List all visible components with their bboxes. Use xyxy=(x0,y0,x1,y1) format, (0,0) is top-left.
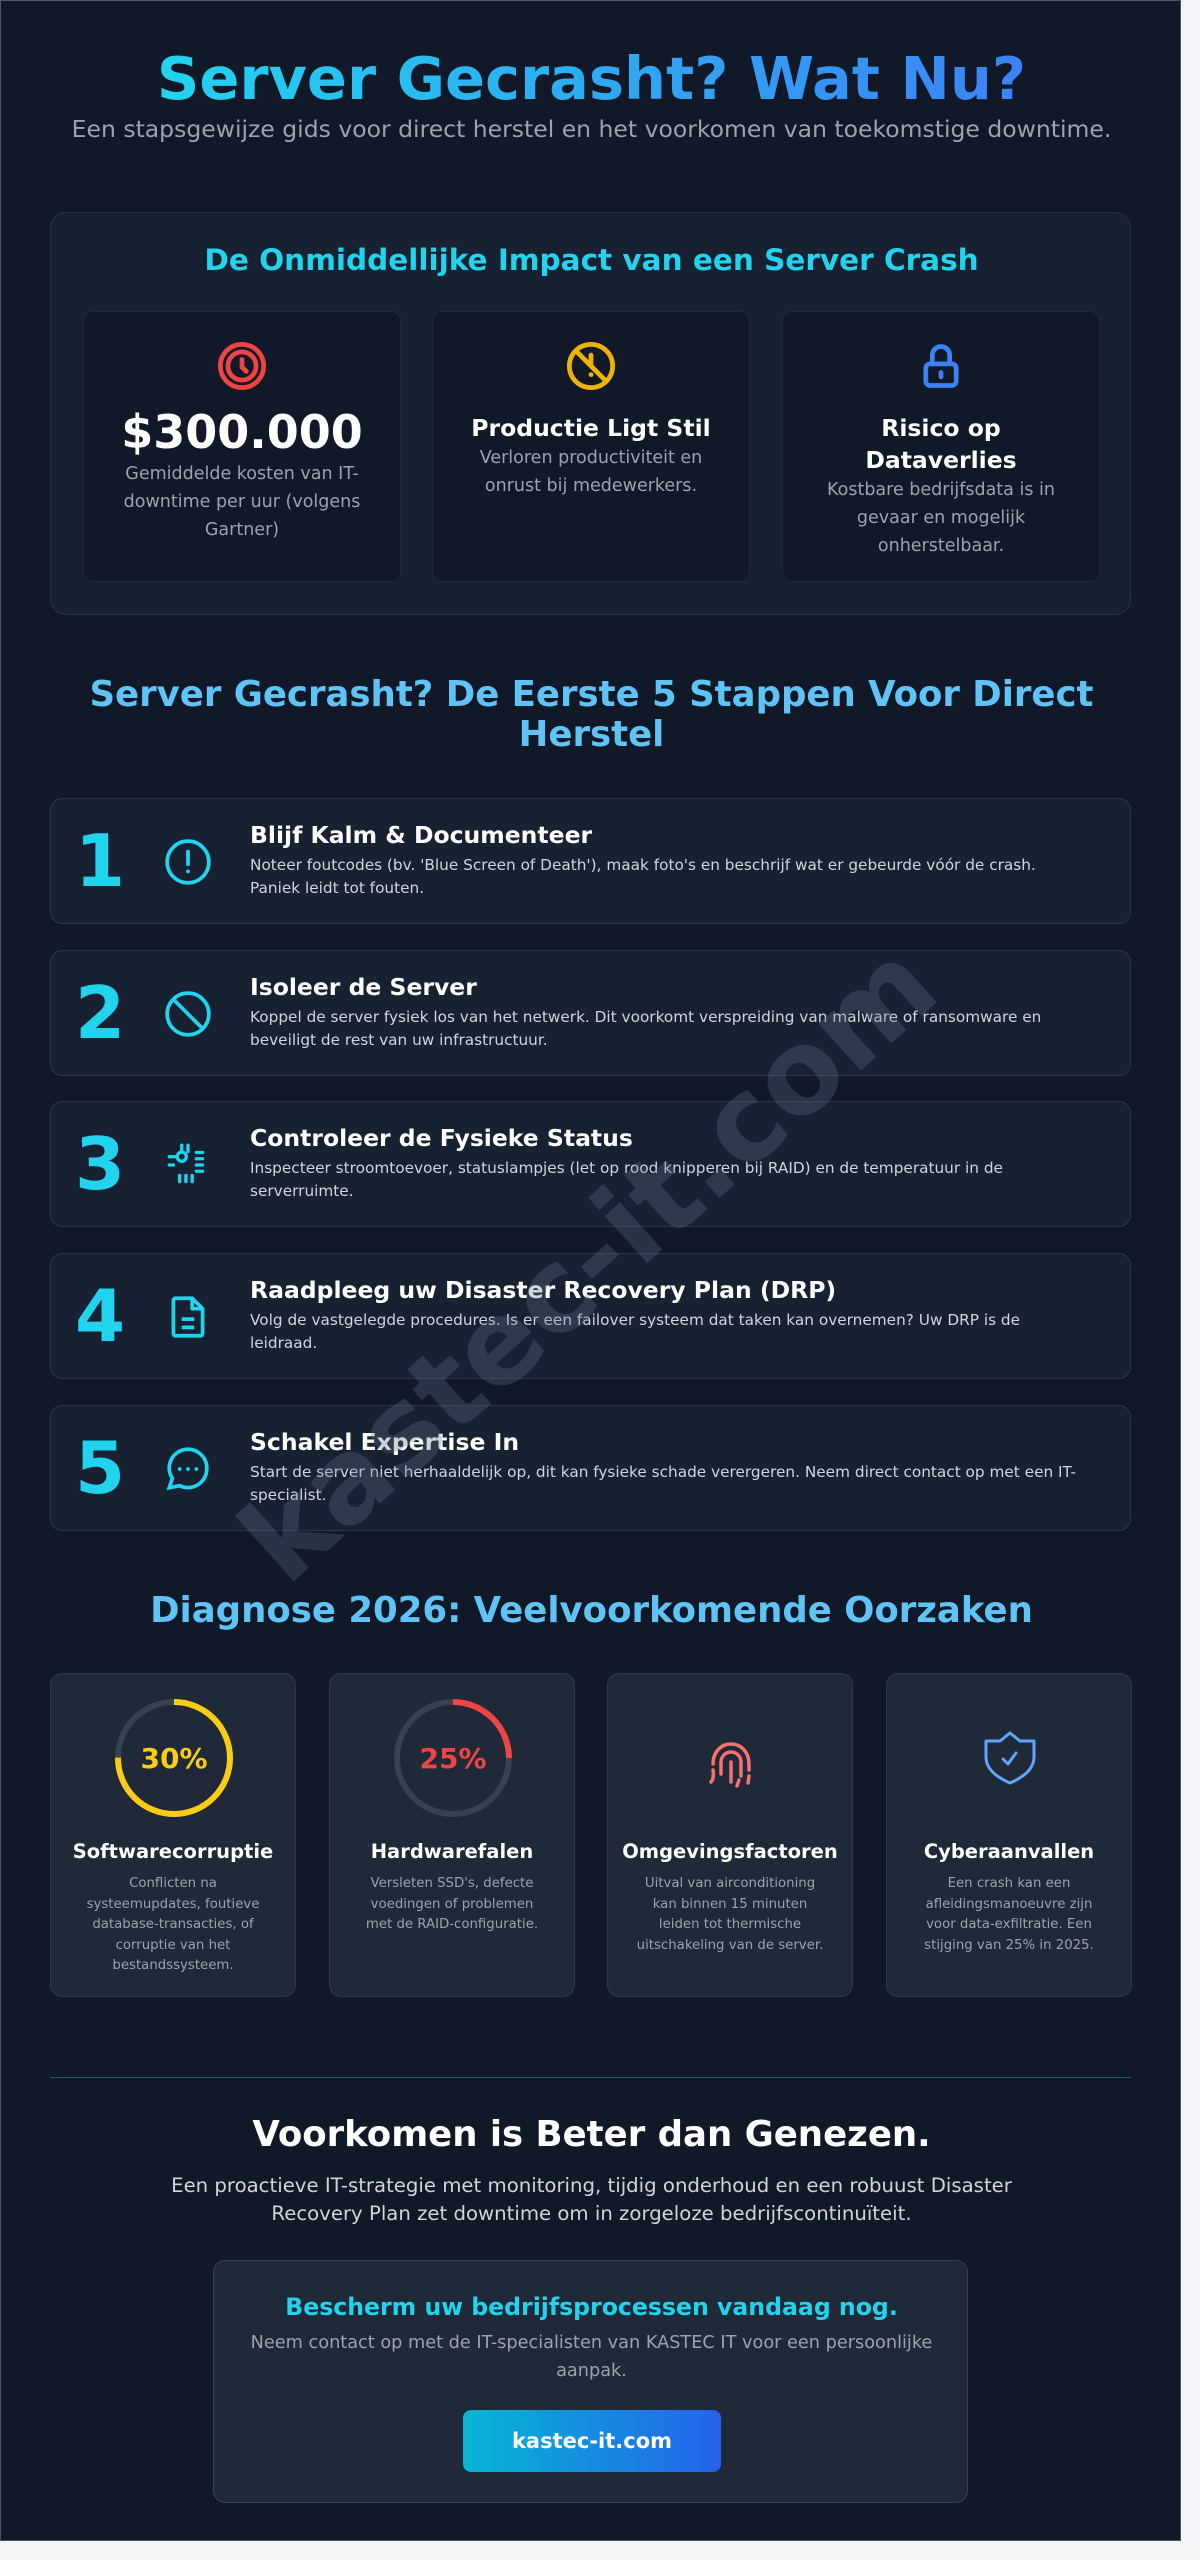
step 5: 5 xyxy=(75,1426,125,1510)
step 5 xyxy=(50,1405,1131,1531)
cause: software xyxy=(50,1673,296,1997)
cause: environment: Uitval van airconditioning kan binnen 15 minuten leiden tot thermische uitschakeling van de server. xyxy=(637,1876,823,1952)
step 5: Start de server niet herhaaldelijk op, dit kan fysieke schade verergeren. Neem direct contact op met een IT-specialist. xyxy=(250,1463,1076,1504)
step 3: Controleer de Fysieke Status xyxy=(250,1124,633,1152)
step 2 xyxy=(50,950,1131,1076)
cause: cyber xyxy=(886,1673,1132,1997)
impact card: cost: Gemiddelde kosten van IT-downtime per uur (volgens Gartner) xyxy=(124,464,360,540)
button: kastec-it.com xyxy=(512,2429,672,2453)
ring 25%: 25% xyxy=(419,1742,487,1775)
ring 30%: 30% xyxy=(140,1742,208,1775)
icon: no xyxy=(566,342,616,390)
icon: lock xyxy=(923,344,959,388)
cause: software: Softwarecorruptie xyxy=(73,1840,273,1863)
step 2: 2 xyxy=(75,971,125,1055)
cause: cyber: Een crash kan een afleidingsmanoeuvre zijn voor data-exfiltratie. Een stijging van 25% in 2025. xyxy=(924,1876,1094,1952)
step 5: Schakel Expertise In xyxy=(250,1428,519,1456)
heading: prevention: Voorkomen is Beter dan Genezen. xyxy=(252,2114,931,2155)
callout: CTA: Bescherm uw bedrijfsprocessen vandaag nog. xyxy=(285,2293,898,2321)
step 3: Inspecteer stroomtoevoer, statuslampjes (let op rood knipperen bij RAID) en de temperatuur in de serverruimte. xyxy=(250,1159,1003,1200)
button xyxy=(463,2410,721,2472)
callout: CTA: Neem contact op met de IT-specialisten van KASTEC IT voor een persoonlijke aanpak. xyxy=(251,2333,932,2381)
step 4: 4 xyxy=(75,1274,125,1358)
divider xyxy=(50,2077,1131,2078)
impact card: data: Dataverlies xyxy=(865,446,1017,474)
impact card: cost xyxy=(83,311,401,582)
subtitle: Een stapsgewijze gids voor direct herstel en het voorkomen van toekomstige downtime. xyxy=(72,115,1111,143)
icon: shield xyxy=(984,1732,1036,1784)
cause: environment xyxy=(607,1673,853,1997)
impact card: cost: $300.000 xyxy=(121,405,363,459)
title: Server Gecrasht? Wat Nu? xyxy=(157,44,1026,113)
step 1: 1 xyxy=(75,819,125,903)
impact card: data xyxy=(782,311,1100,582)
icon: clock xyxy=(218,342,266,390)
icon: fingerprint xyxy=(709,1742,751,1788)
impact card: production xyxy=(432,311,750,582)
ring 25% xyxy=(394,1699,512,1817)
cause: environment: Omgevingsfactoren xyxy=(622,1840,838,1863)
impact card: production: Verloren productiviteit en onrust bij medewerkers. xyxy=(480,448,702,496)
step 3: 3 xyxy=(75,1122,125,1206)
step 1 xyxy=(50,798,1131,924)
heading: causes: Diagnose 2026: Veelvoorkomende Oorzaken xyxy=(150,1590,1033,1631)
watermark: kastec-it.com xyxy=(215,917,962,1609)
step 1: Noteer foutcodes (bv. 'Blue Screen of Death'), maak foto's en beschrijf wat er gebeurde vóór de crash. Paniek leidt tot fouten. xyxy=(250,856,1036,897)
icon: document xyxy=(172,1296,204,1338)
icon: alert xyxy=(165,839,211,885)
step 4 xyxy=(50,1253,1131,1379)
step 1: Blijf Kalm & Documenteer xyxy=(250,821,592,849)
step 4: Volg de vastgelegde procedures. Is er een failover systeem dat taken kan overnemen? Uw DRP is de leidraad. xyxy=(250,1311,1020,1352)
cause: cyber: Cyberaanvallen xyxy=(924,1840,1094,1863)
text: prevention: Een proactieve IT-strategie met monitoring, tijdig onderhoud en een robuust Disaster Recovery Plan zet downtime om in zorgeloze bedrijfscontinuïteit. xyxy=(171,2174,1012,2225)
cause: hardware xyxy=(329,1673,575,1997)
step 3 xyxy=(50,1101,1131,1227)
icon: chip xyxy=(168,1144,204,1184)
callout: CTA xyxy=(213,2260,968,2503)
icon: chat xyxy=(166,1447,209,1490)
panel: impact xyxy=(50,212,1131,615)
step 2: Koppel de server fysiek los van het netwerk. Dit voorkomt verspreiding van malware of ransomware en beveiligt de rest van uw infrastructuur. xyxy=(250,1008,1041,1049)
cause: hardware: Versleten SSD's, defecte voedingen of problemen met de RAID-configuratie. xyxy=(366,1876,538,1932)
icon: ban xyxy=(165,991,211,1037)
impact card: data: Kostbare bedrijfsdata is in gevaar en mogelijk onherstelbaar. xyxy=(827,480,1055,556)
cause: software: Conflicten na systeemupdates, foutieve database-transacties, of corruptie van het bestandssysteem. xyxy=(87,1876,259,1973)
impact card: data: Risico op xyxy=(881,414,1001,442)
ring 30% xyxy=(115,1699,233,1817)
cause: hardware: Hardwarefalen xyxy=(371,1840,533,1863)
heading: steps: Server Gecrasht? De Eerste 5 Stappen Voor Direct Herstel xyxy=(89,674,1094,755)
impact heading: De Onmiddellijke Impact van een Server Crash xyxy=(204,243,979,277)
step 2: Isoleer de Server xyxy=(250,973,477,1001)
step 4: Raadpleeg uw Disaster Recovery Plan (DRP) xyxy=(250,1276,836,1304)
impact card: production: Productie Ligt Stil xyxy=(471,414,711,442)
